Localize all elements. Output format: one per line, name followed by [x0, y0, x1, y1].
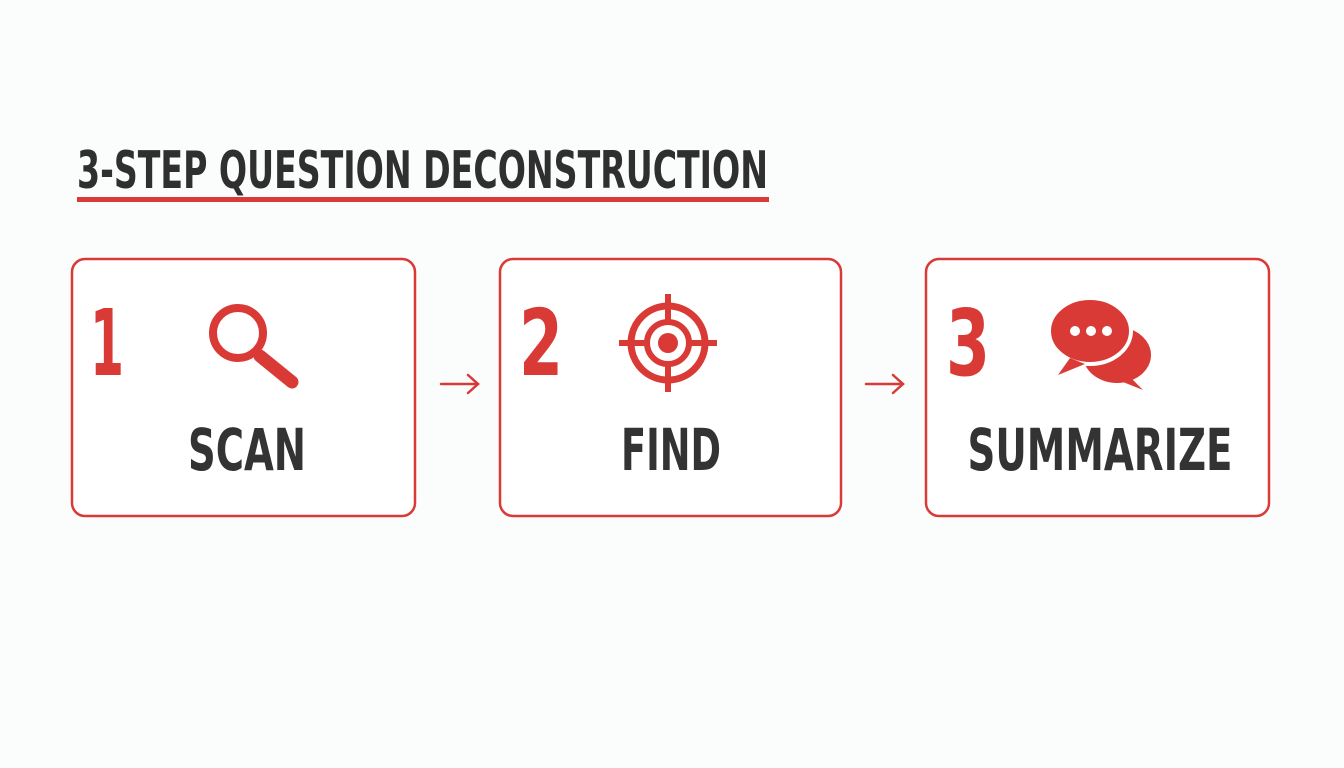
panel: step 1 scan [72, 259, 415, 516]
label: SCAN: SCAN [188, 416, 306, 484]
panel: step 3 summarize [926, 259, 1269, 516]
label: FIND: FIND [621, 416, 721, 484]
icon: magnifier [213, 308, 292, 382]
number 1: 1 [90, 290, 124, 397]
arrow 2 [866, 375, 903, 393]
panel: step 2 find [500, 259, 841, 516]
label: SUMMARIZE: SUMMARIZE [968, 416, 1232, 484]
number 2: 2 [519, 290, 563, 397]
title: 3-STEP QUESTION DECONSTRUCTION [77, 141, 768, 201]
number 3: 3 [946, 290, 990, 397]
icon: chat bubbles [1049, 298, 1151, 390]
icon: target [619, 294, 717, 392]
arrow 1 [441, 375, 478, 393]
